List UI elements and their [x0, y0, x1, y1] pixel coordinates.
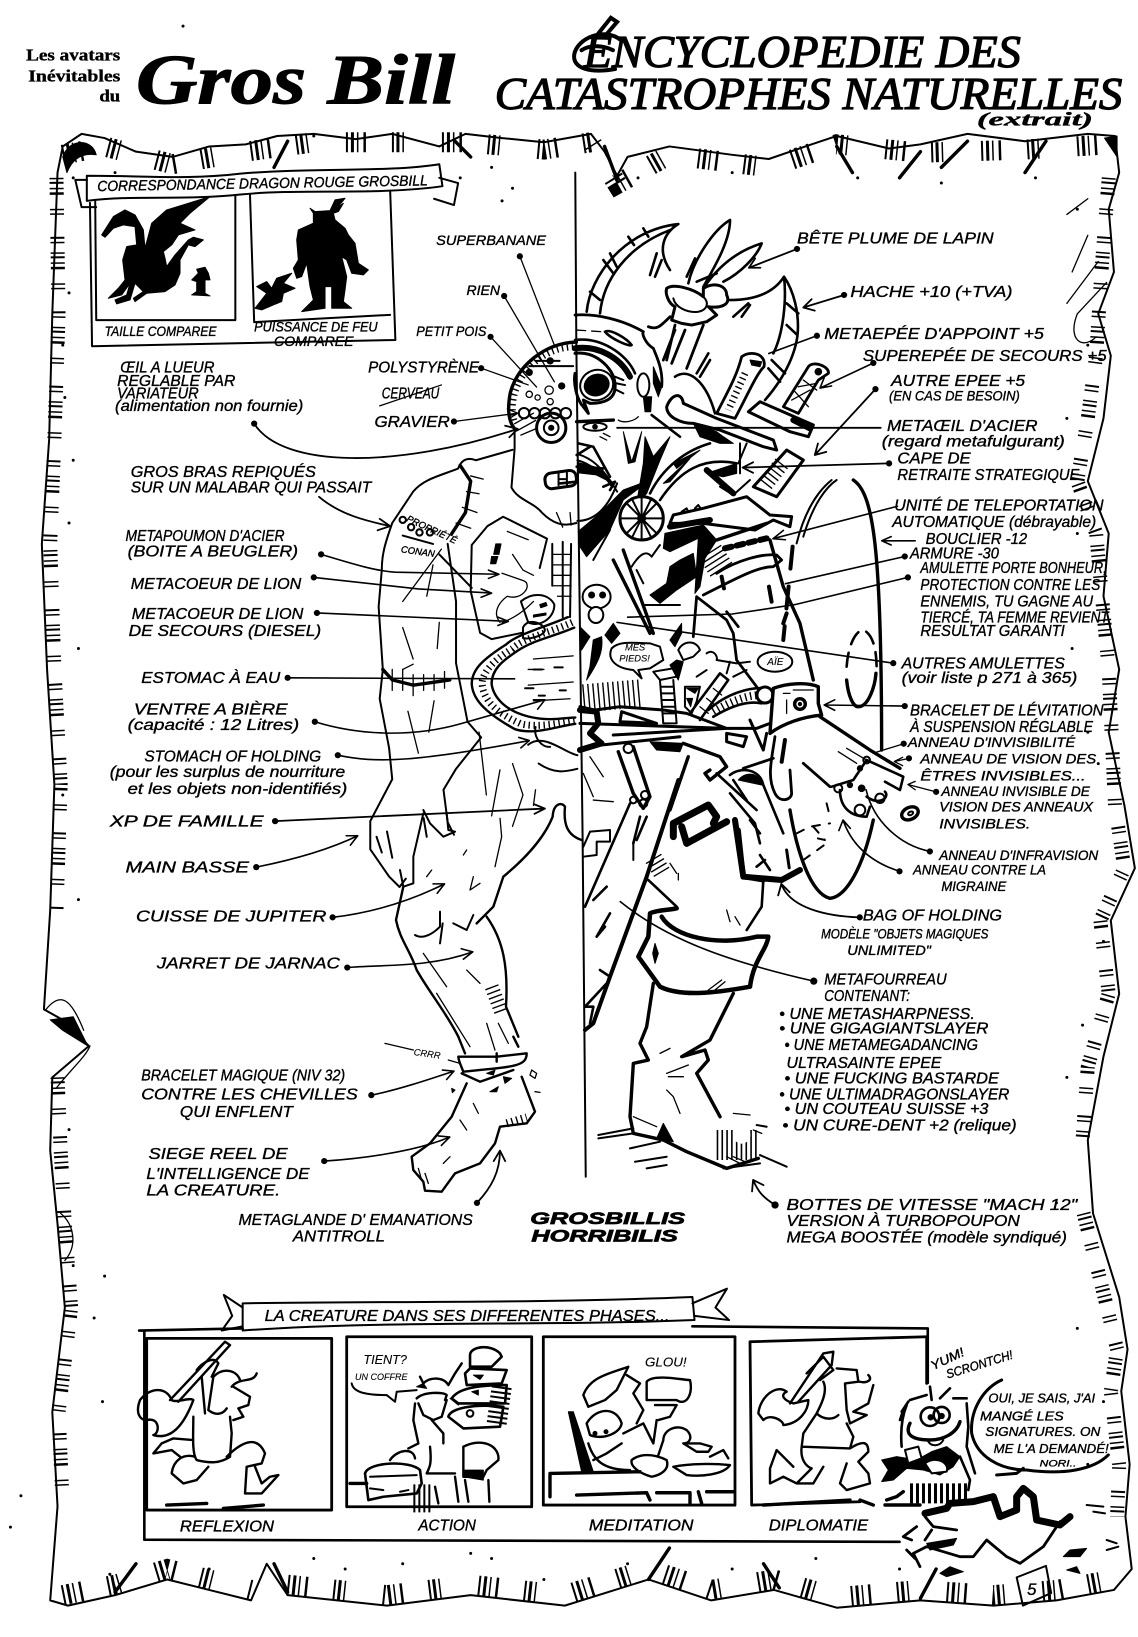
left arm with stitches	[370, 450, 513, 887]
page number	[1017, 1566, 1051, 1606]
label: oeil a lueur: REGLABLE PAR	[117, 373, 235, 390]
dagger	[690, 673, 728, 720]
caption: action: ACTION	[417, 1517, 477, 1534]
label: bouclier	[882, 531, 1027, 548]
title: Encyclopedie des catastrophes naturelles	[495, 18, 1122, 131]
central divider line	[575, 173, 586, 1177]
label: bracelet magique: BRACELET MAGIQUE (NIV 32)	[141, 1068, 345, 1085]
skeleton	[678, 643, 700, 660]
pompom and ground	[717, 1130, 757, 1160]
page number: 5	[1027, 1580, 1037, 1599]
speech bubble: tient un coffre: TIENT?	[363, 1353, 407, 1367]
label: autres amulettes	[617, 622, 1077, 687]
speech bubble: aie: AÏE	[766, 656, 784, 668]
label: bracelet de levitation: À SUSPENSION RÉGLABLE	[909, 717, 1094, 736]
banner: phases	[222, 1289, 729, 1331]
label: metaepee	[769, 324, 1044, 354]
title: Encyclopedie des catastrophes naturelles: ENCYCLOPEDIE DES	[583, 27, 1021, 77]
comic outer frame	[139, 1326, 928, 1542]
label: bottes de vitesse: MEGA BOOSTÉE (modèle syndiqué)	[787, 1228, 1067, 1247]
heading: Grosbillis Horribilis: HORRIBILIS	[531, 1227, 678, 1246]
label: ventre a biere: (capacité : 12 Litres)	[128, 717, 299, 734]
label: bottes de vitesse: BOTTES DE VITESSE "MACH 12"	[787, 1197, 1079, 1214]
label: stomach of holding	[110, 737, 529, 798]
label: amulette porte bonheur: TIERCÉ, TA FEMME REVIENT	[920, 607, 1110, 626]
label: bottes de vitesse	[752, 1180, 1079, 1247]
speech bubble: oui je sais: ME L'A DEMANDÉ!	[994, 1441, 1109, 1456]
boot	[630, 983, 758, 1168]
label: amulette porte bonheur: ENNEMIS, TU GAGNE AU	[920, 594, 1094, 611]
label: cape de retraite: CAPE DE	[897, 450, 971, 467]
label: polystyrene: POLYSTYRÈNE	[368, 357, 480, 376]
tube and stomach	[472, 617, 577, 771]
figure: Gros Bill warrior right half	[560, 220, 920, 1168]
label: metaglande: ANTITROLL	[292, 1229, 385, 1246]
label: metaglande	[238, 1151, 505, 1246]
label: bag of holding: BAG OF HOLDING	[863, 907, 1002, 924]
label: oeil a lueur: ŒIL A LUEUR	[120, 359, 214, 376]
left arm with stitches: PROPRIÉTÉ	[405, 513, 460, 546]
label: amulette porte bonheur	[628, 560, 1110, 640]
label: autre epee	[815, 373, 1025, 455]
face dark hair	[623, 432, 642, 463]
metaeye lash and face	[577, 420, 613, 422]
label: estomac a eau: ESTOMAC À EAU	[141, 668, 281, 687]
caption: puissance de feu comparee: PUISSANCE DE FEU	[254, 320, 378, 335]
label: superepee: SUPEREPÉE DE SECOURS +5	[863, 346, 1107, 365]
label: metafourreau list: • UNE METAMEGADANCING	[784, 1037, 978, 1054]
speech bubble: tient un coffre: UN COFFRE	[355, 1372, 409, 1382]
label: metaepee: METAEPÉE D'APPOINT +5	[824, 324, 1044, 343]
label: hache +10: HACHE +10 (+TVA)	[850, 284, 1012, 301]
speech bubble: oui je sais: MANGÉ LES	[980, 1408, 1064, 1423]
label: bete plume de lapin: BÊTE PLUME DE LAPIN	[797, 229, 994, 248]
label: anneau contre la migraine: ANNEAU CONTRE LA	[912, 862, 1046, 877]
banner: correspondance: CORRESPONDANCE DRAGON ROUGE GROSBILL	[97, 173, 428, 195]
caption: reflexion: REFLEXION	[180, 1518, 275, 1535]
hanging scabbard tops	[618, 743, 727, 810]
speech bubble: aie	[758, 652, 792, 672]
label: metafourreau list: ULTRASAINTE EPEE	[787, 1055, 942, 1072]
label: metaglande: METAGLANDE D' EMANATIONS	[238, 1212, 473, 1229]
title: Gros Bill: Gros Bill	[136, 42, 455, 120]
label: ventre a biere	[128, 699, 545, 734]
label: bouclier: BOUCLIER -12	[926, 531, 1027, 548]
pouch strap	[717, 773, 757, 810]
title: Les avatars inevitables du: Inévitables	[28, 67, 121, 86]
label: gravier	[374, 409, 518, 431]
title: Encyclopedie des catastrophes naturelles: CATASTROPHES NATURELLES	[495, 69, 1122, 119]
label: petit pois: PETIT POIS	[416, 324, 486, 339]
label: siege reel	[146, 1136, 450, 1200]
label: superbanane: SUPERBANANE	[436, 233, 547, 248]
panel: correspondance dragon rouge / Gros Bill	[75, 164, 458, 349]
label: siege reel: L'INTELLIGENCE DE	[146, 1166, 310, 1183]
figure: Gros Bill anatomy left half	[370, 342, 582, 1192]
abdomen	[479, 732, 536, 826]
label: stomach of holding: et les objets non-identifiés)	[128, 781, 347, 798]
label: estomac a eau	[141, 668, 515, 687]
sword two	[783, 364, 828, 413]
label: siege reel: LA CREATURE.	[146, 1183, 280, 1200]
label: cape de retraite	[743, 450, 1080, 484]
label: gros bras: GROS BRAS REPIQUÉS	[131, 462, 316, 481]
speech bubble: mes pieds: PIEDS!	[619, 654, 650, 664]
label: cerveau crossed out: CERVEAU	[382, 386, 440, 403]
trousers with meander and scabbard	[583, 780, 787, 1168]
heading: Grosbillis Horribilis	[530, 1209, 685, 1246]
label: hache +10	[803, 284, 1012, 311]
label: anneau invisible: VISION DES ANNEAUX	[939, 800, 1094, 815]
speech bubble: mes pieds	[610, 643, 663, 678]
heading: Grosbillis Horribilis: GROSBILLIS	[530, 1209, 685, 1228]
panel: la creature dans ses differentes phases	[138, 1289, 928, 1542]
bracelet	[770, 684, 822, 733]
speech bubble: oui je sais: OUI, JE SAIS, J'AI	[988, 1392, 1096, 1406]
label: metacoeur de secours	[129, 606, 508, 640]
mascot: hairy monster eating signatures	[882, 1387, 975, 1505]
label: anneau d'infravision: ANNEAU D'INFRAVISION	[938, 848, 1098, 863]
ear piece	[637, 373, 649, 397]
label: metafourreau list: • UNE GIGAGIANTSLAYER	[779, 1020, 988, 1037]
label: armure	[786, 546, 999, 584]
rabbit feathers	[687, 220, 762, 288]
label: oeil a lueur: VARIATEUR	[117, 386, 199, 403]
label: rien: RIEN	[466, 283, 500, 298]
left arm with stitches: CONAN	[400, 543, 436, 559]
caption: meditation: MEDITATION	[589, 1517, 694, 1534]
label: gros bras: SUR UN MALABAR QUI PASSAIT	[131, 480, 373, 497]
helmet	[575, 315, 703, 387]
axe, feathers, helmet and swords	[560, 220, 828, 503]
banner: correspondance	[75, 164, 458, 207]
left leg and foot: CRRR	[413, 1047, 441, 1061]
label: metacoeur de secours: DE SECOURS (DIESEL)	[129, 623, 321, 640]
label: xp de famille	[108, 804, 545, 830]
label: autre epee: (EN CAS DE BESOIN)	[889, 389, 1020, 404]
label: unite de teleportation: UNITÉ DE TELEPORTATION	[894, 495, 1104, 514]
label: metacoeur de secours: METACOEUR DE LION	[132, 606, 304, 623]
shoulder plates	[670, 497, 792, 530]
title: Les avatars inevitables du: Les avatars	[26, 46, 121, 65]
label: metacoeur de lion: METACOEUR DE LION	[131, 576, 302, 593]
steel eye	[575, 340, 635, 373]
label: anneau d'infravision	[866, 790, 1098, 863]
label: cape de retraite: RETRAITE STRATEGIQUE	[897, 467, 1080, 484]
cape folds	[650, 443, 737, 500]
label: stomach of holding: STOMACH OF HOLDING	[144, 748, 321, 765]
label: anneau invisible: ANNEAU INVISIBLE DE	[940, 784, 1091, 799]
label: bag of holding: UNLIMITED"	[847, 943, 932, 958]
label: metaoeil	[617, 418, 1065, 451]
label: anneau contre la migraine	[839, 820, 1046, 894]
label: autres amulettes: (voir liste p 271 à 365)	[902, 670, 1077, 687]
label: anneau d'invisibilite: ANNEAU D'INVISIBILITÉ	[907, 735, 1076, 750]
label: metacoeur de lion	[131, 575, 492, 597]
brooch	[620, 497, 663, 540]
small ring icon	[900, 804, 920, 822]
label: jarret de jarnac: JARRET DE JARNAC	[156, 956, 341, 973]
speech bubble: tient un coffre	[352, 1353, 417, 1402]
label: bag of holding	[778, 884, 1002, 958]
small dashed oval	[847, 630, 877, 668]
label: anneau de vision	[894, 752, 1096, 783]
label: rien	[466, 283, 554, 382]
label: bracelet de levitation: BRACELET DE LÉVITATION	[910, 700, 1104, 719]
label: bracelet de levitation	[824, 700, 1104, 736]
label: anneau de vision: ANNEAU DE VISION DES	[919, 752, 1096, 767]
face and neck	[511, 429, 577, 527]
caption: puissance de feu comparee: COMPAREE	[274, 334, 355, 349]
label: bracelet magique: QUI ENFLENT	[180, 1104, 294, 1121]
flower clasp	[666, 285, 728, 325]
label: bete plume de lapin	[749, 229, 994, 268]
bone shaped horn	[667, 396, 777, 450]
label: cuisse de jupiter	[136, 884, 445, 926]
label: amulette porte bonheur: PROTECTION CONTRE LES	[920, 577, 1101, 594]
label: anneau contre la migraine: MIGRAINE	[941, 879, 1007, 894]
label: jarret de jarnac	[156, 949, 473, 973]
face lower	[577, 454, 617, 521]
label: metapoumon: METAPOUMON D'ACIER	[126, 528, 284, 545]
speech bubble: oui je sais: SIGNATURES. ON	[985, 1425, 1101, 1439]
label: main basse: MAIN BASSE	[126, 859, 250, 876]
label: siege reel: SIEGE REEL DE	[149, 1146, 288, 1163]
sash	[613, 550, 653, 633]
speech bubble: oui je sais: NORI..	[1040, 1458, 1076, 1469]
label: metafourreau list: • UNE ULTIMADRAGONSLAYER	[779, 1086, 1009, 1103]
banner: phases: LA CREATURE DANS SES DIFFERENTES PHASES...	[265, 1308, 669, 1325]
sound effects: yum scrontch: YUM!	[928, 1345, 967, 1373]
caption: taille comparee: TAILLE COMPAREE	[105, 324, 217, 339]
label: anneau de vision: ÊTRES INVISIBLES...	[920, 768, 1086, 783]
title: Encyclopedie des catastrophes naturelles: (extrait)	[977, 110, 1093, 131]
label: anneau invisible	[908, 781, 1094, 831]
speech bubble: mes pieds: MES	[625, 643, 646, 653]
torn map patch	[903, 1488, 1118, 1577]
comic panel: reflexion	[138, 1338, 332, 1510]
label: oeil a lueur: (alimentation non fournie)	[115, 398, 303, 415]
label: metafourreau list: • UN CURE-DENT +2 (relique)	[782, 1118, 1017, 1135]
label: cuisse de jupiter: CUISSE DE JUPITER	[136, 909, 326, 926]
caption: diplomatie: DIPLOMATIE	[769, 1517, 869, 1534]
comic panel: diplomatie	[750, 1337, 927, 1505]
skull with gravel	[509, 342, 576, 442]
label: autre epee: AUTRE EPEE +5	[890, 373, 1025, 390]
label: metafourreau list	[620, 902, 1017, 1135]
title: Les avatars inevitables du	[26, 46, 121, 105]
speech bubble: oui je sais	[972, 1380, 1109, 1475]
label: polystyrene	[368, 357, 528, 385]
label: bottes de vitesse: VERSION À TURBOPOUPON	[787, 1211, 1021, 1230]
label: anneau invisible: INVISIBLES.	[939, 816, 1030, 831]
hand with rings	[730, 717, 920, 898]
title: Les avatars inevitables du: du	[99, 86, 120, 105]
silhouette: dragon vs man	[102, 197, 210, 304]
belt	[580, 707, 770, 747]
boot cuff	[638, 908, 768, 993]
upper arm	[770, 540, 813, 680]
comic panel: meditation: GLOU!	[645, 1355, 687, 1370]
meander	[673, 805, 727, 843]
label: bracelet magique	[141, 1068, 454, 1121]
shield	[853, 480, 882, 750]
label: bag of holding: MODÈLE "OBJETS MAGIQUES	[821, 926, 988, 941]
axe left blade	[587, 224, 678, 313]
label: metaoeil: METAŒIL D'ACIER	[887, 418, 1038, 435]
silhouette: Gros Bill vs small dragon	[255, 198, 368, 312]
label: metafourreau list: CONTENANT:	[824, 988, 910, 1005]
label: bracelet magique: CONTRE LES CHEVILLES	[141, 1086, 358, 1103]
scabbard	[753, 450, 803, 497]
label: metafourreau list: • UN COUTEAU SUISSE +3	[784, 1101, 989, 1118]
comic panel: meditation	[543, 1337, 735, 1505]
label: ventre a biere: VENTRE A BIÈRE	[134, 699, 288, 718]
black armor shadow	[663, 525, 717, 593]
label: metapoumon	[126, 528, 499, 578]
label: superepee	[820, 346, 1107, 388]
label: cerveau crossed out	[380, 385, 441, 406]
label: main basse	[126, 836, 358, 876]
label: autres amulettes: AUTRES AMULETTES	[901, 655, 1065, 672]
open chest with organs	[439, 517, 571, 639]
sword one	[717, 353, 764, 418]
label: petit pois	[416, 324, 537, 387]
skull amulet	[583, 585, 611, 609]
label: metafourreau list: • UNE FUCKING BASTARDE	[784, 1071, 999, 1088]
label: metaoeil: (regard metafulgurant)	[882, 434, 1065, 451]
axe right blade	[697, 277, 798, 400]
label: gros bras	[131, 462, 390, 530]
label: metapoumon: (BOITE A BEUGLER)	[128, 543, 298, 560]
sound effects: yum scrontch: SCRONTCH!	[944, 1348, 1015, 1382]
label: gravier: GRAVIER	[374, 414, 450, 431]
label: xp de famille: XP DE FAMILLE	[108, 813, 264, 830]
label: metafourreau list: • UNE METASHARPNESS.	[779, 1006, 975, 1023]
label: unite de teleportation	[773, 495, 1104, 540]
label: amulette porte bonheur: RESULTAT GARANTI	[920, 623, 1065, 640]
caption: puissance de feu comparee	[254, 320, 378, 349]
label: armure: ARMURE -30	[909, 546, 999, 563]
label: unite de teleportation: AUTOMATIQUE (débrayable)	[891, 514, 1096, 531]
bag of holding oval	[790, 810, 873, 898]
left leg and foot	[385, 804, 582, 1192]
label: anneau d'invisibilite	[873, 735, 1076, 753]
comic panel: action	[347, 1337, 532, 1507]
armoured torso, arm, belt	[580, 480, 882, 810]
label: superbanane	[436, 233, 554, 345]
pocket pouch	[735, 820, 800, 880]
label: oeil a lueur	[115, 359, 518, 458]
label: metafourreau list: METAFOURREAU	[824, 971, 947, 988]
label: stomach of holding: (pour les surplus de nourriture	[110, 764, 345, 781]
